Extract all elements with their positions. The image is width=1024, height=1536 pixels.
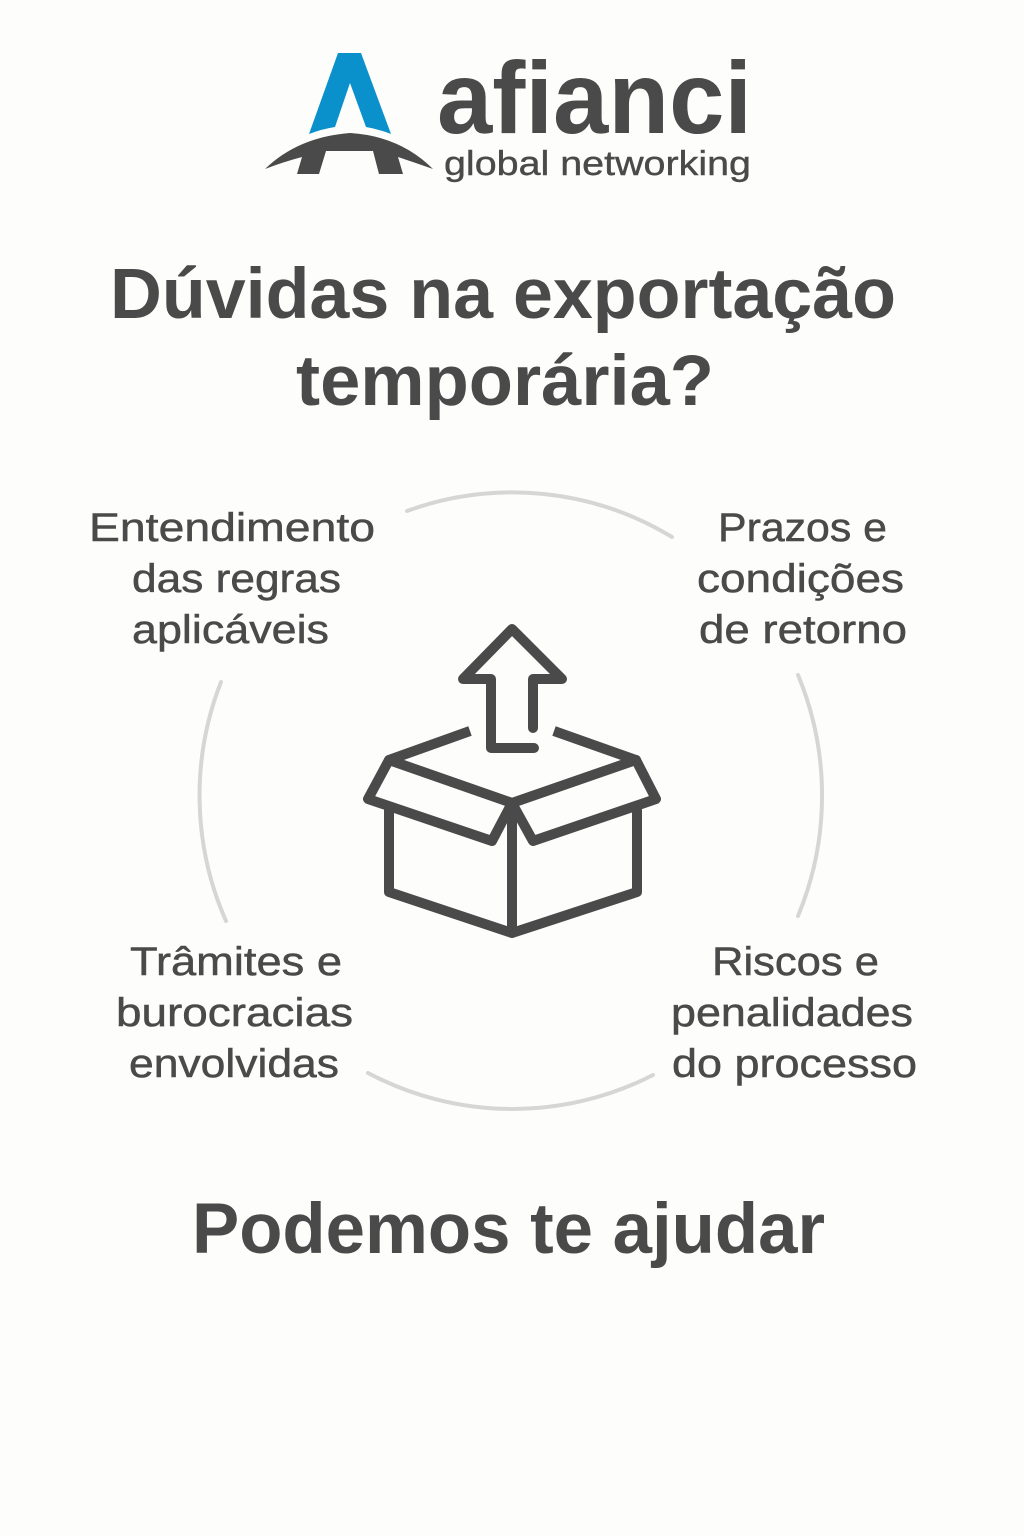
- label: Riscos e penalidades do processo: Riscos e: [712, 940, 879, 984]
- label: Trâmites e burocracias envolvidas: [116, 940, 353, 1086]
- icon: dark arch: [265, 133, 433, 174]
- label: Entendimento das regras aplicáveis: [89, 506, 375, 652]
- arrow: [463, 629, 562, 748]
- label: Prazos e condições de retorno: condições: [697, 557, 904, 601]
- right flap: [512, 760, 656, 841]
- title: temporária?: [296, 342, 714, 421]
- label: Trâmites e burocracias envolvidas: Trâmites e: [130, 940, 342, 984]
- label: Trâmites e burocracias envolvidas: burocracias: [116, 991, 353, 1035]
- label: Riscos e penalidades do processo: [671, 940, 917, 1086]
- left flap: [368, 760, 512, 841]
- label: Prazos e condições de retorno: de retorno: [699, 608, 907, 652]
- label: Riscos e penalidades do processo: penalidades: [671, 991, 913, 1035]
- icon: blue A mark: [309, 53, 391, 134]
- closing heading: Podemos te ajudar: [192, 1190, 825, 1269]
- label: Entendimento das regras aplicáveis: Entendimento: [89, 506, 375, 550]
- label: Riscos e penalidades do processo: do processo: [672, 1042, 917, 1086]
- label: Entendimento das regras aplicáveis: aplicáveis: [132, 608, 329, 652]
- label: Entendimento das regras aplicáveis: das regras: [132, 557, 341, 601]
- box top edges: [389, 731, 636, 803]
- label: Trâmites e burocracias envolvidas: envolvidas: [129, 1042, 339, 1086]
- logo wordmark: afianci: [437, 41, 752, 155]
- icon: open box with up arrow: [368, 629, 656, 933]
- logo: afianci global networking: [265, 41, 752, 183]
- title: Dúvidas na exportação: [110, 255, 896, 334]
- ring arcs: [200, 492, 822, 1109]
- box body: [389, 803, 637, 933]
- label: Prazos e condições de retorno: Prazos e: [718, 506, 887, 550]
- title: [110, 255, 896, 421]
- logo tagline: global networking: [444, 145, 751, 183]
- label: Prazos e condições de retorno: [697, 506, 907, 652]
